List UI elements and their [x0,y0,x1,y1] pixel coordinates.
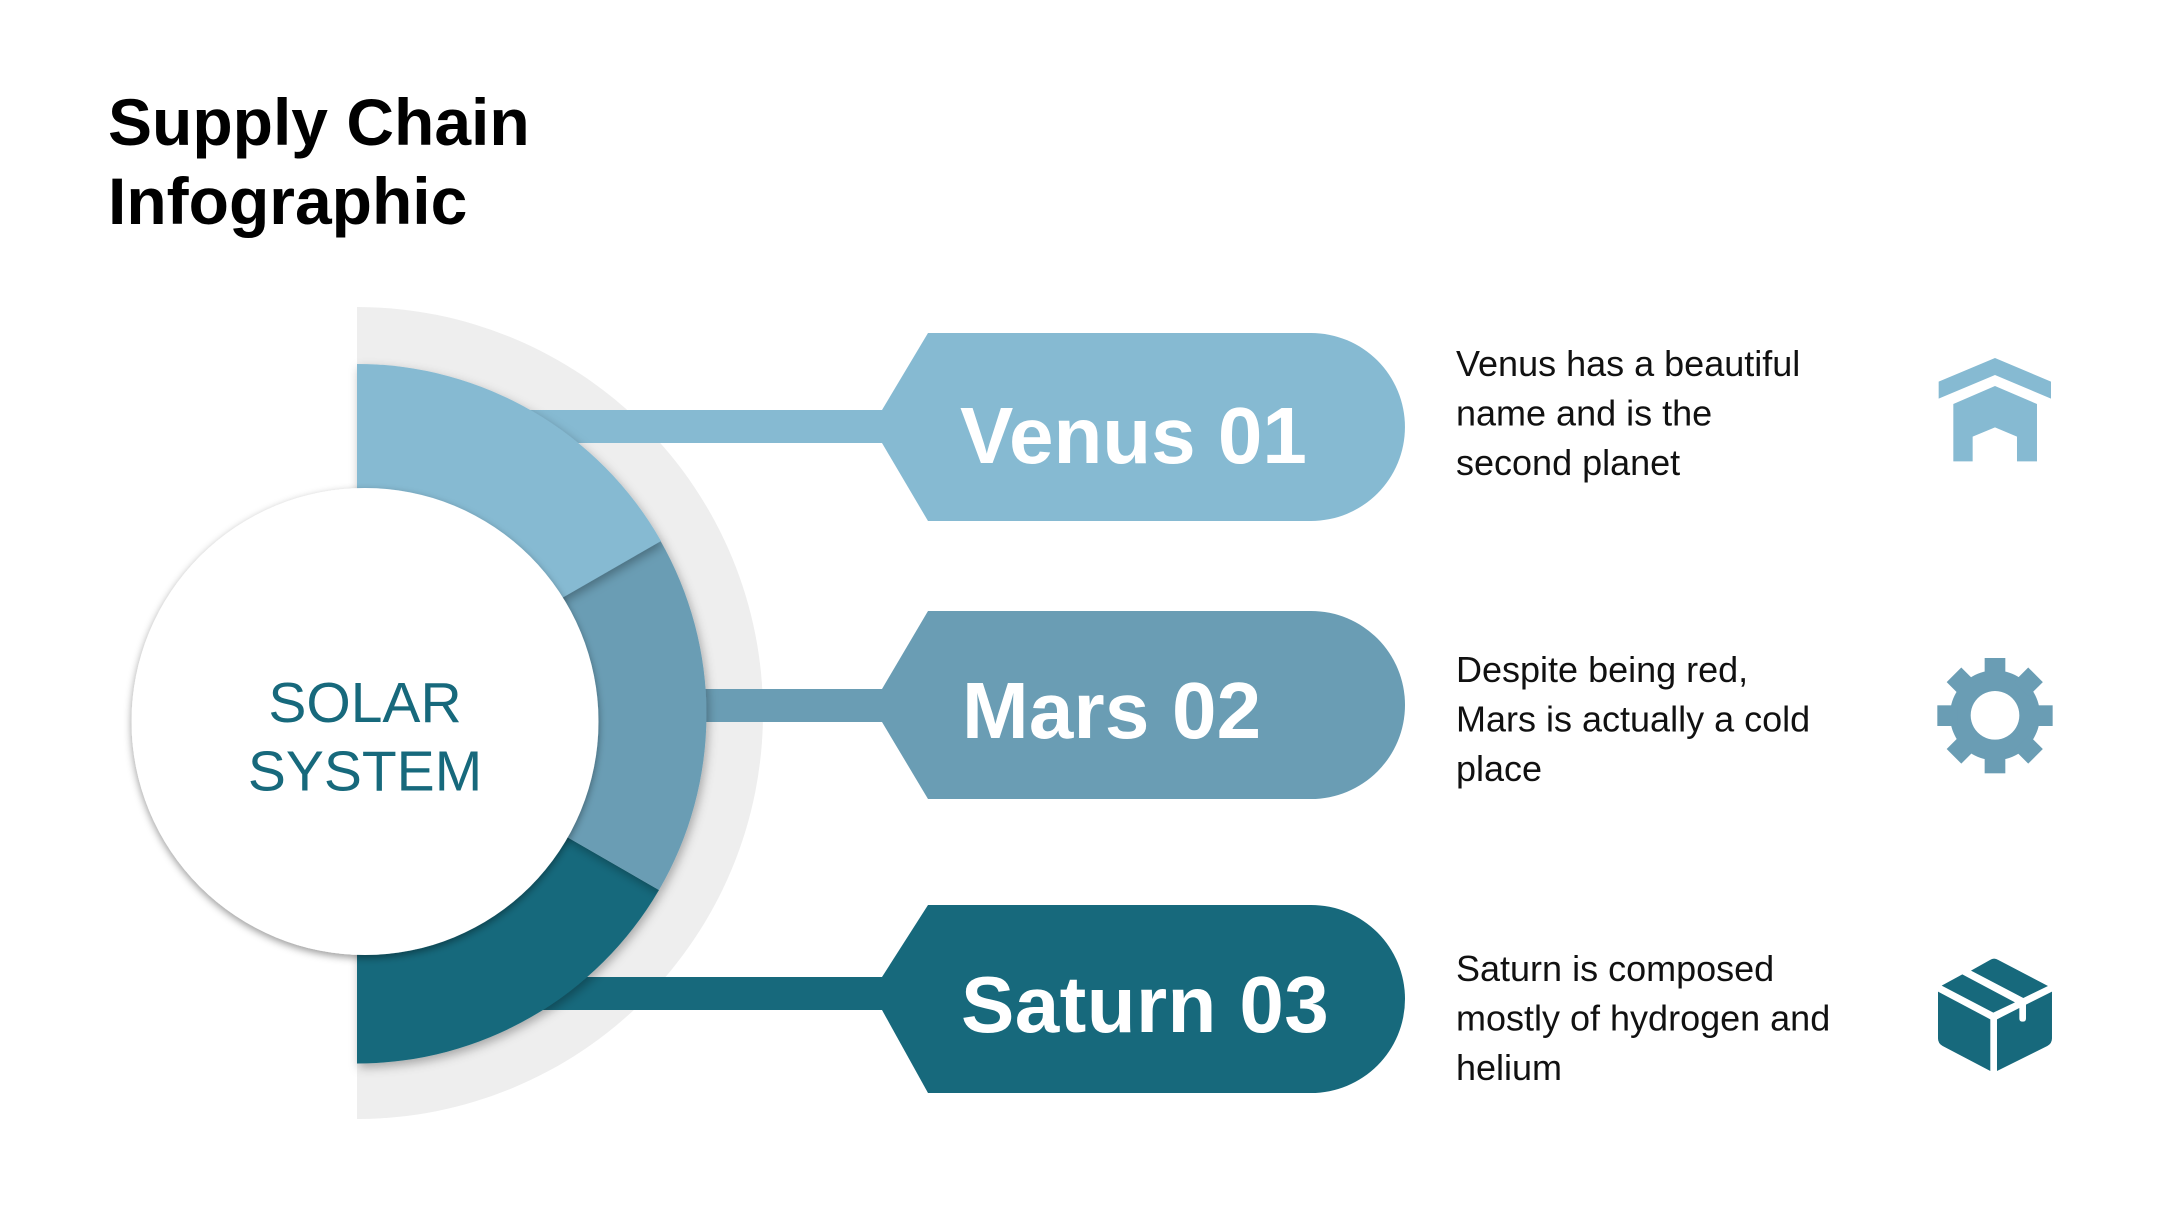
title: Supply Chain [108,85,530,159]
icon: house [1939,358,2051,461]
pill: Mars 02 [882,611,1405,799]
description: Saturn: Saturn is composed [1456,948,1774,989]
ring segment: Venus [357,364,661,716]
pill: Venus 01 [882,333,1405,521]
description: Saturn: mostly of hydrogen and [1456,998,1830,1038]
icon: gear [1937,658,2053,773]
center label [248,671,482,804]
center label: SYSTEM [248,740,482,804]
ring segment: Mars [357,540,706,890]
center circle [132,488,598,955]
description: Venus [1456,343,1800,483]
connector: Saturn [520,977,900,1010]
pill: Mars 02: Mars 02 [962,666,1261,755]
pill: Venus 01: Venus 01 [960,391,1307,480]
title [108,85,530,238]
description: Mars: Mars is actually a cold [1456,698,1810,740]
title: Infographic [108,164,467,238]
ring segment: Saturn [357,716,659,1064]
description: Venus: name and is the [1456,392,1712,434]
description: Venus: Venus has a beautiful [1456,343,1800,384]
center label: SOLAR [268,671,462,735]
description: Saturn: helium [1456,1047,1562,1088]
pill: Saturn 03 [882,905,1405,1093]
icon: box [1938,959,2052,1071]
connector: Venus [520,410,900,443]
connector: Mars [690,689,900,722]
description: Mars: Despite being red, [1456,649,1748,690]
background half circle [357,307,763,1119]
pill: Saturn 03: Saturn 03 [961,960,1329,1049]
description: Saturn [1456,948,1830,1088]
description: Mars: place [1456,748,1542,789]
description: Mars [1456,649,1810,789]
description: Venus: second planet [1456,442,1680,483]
